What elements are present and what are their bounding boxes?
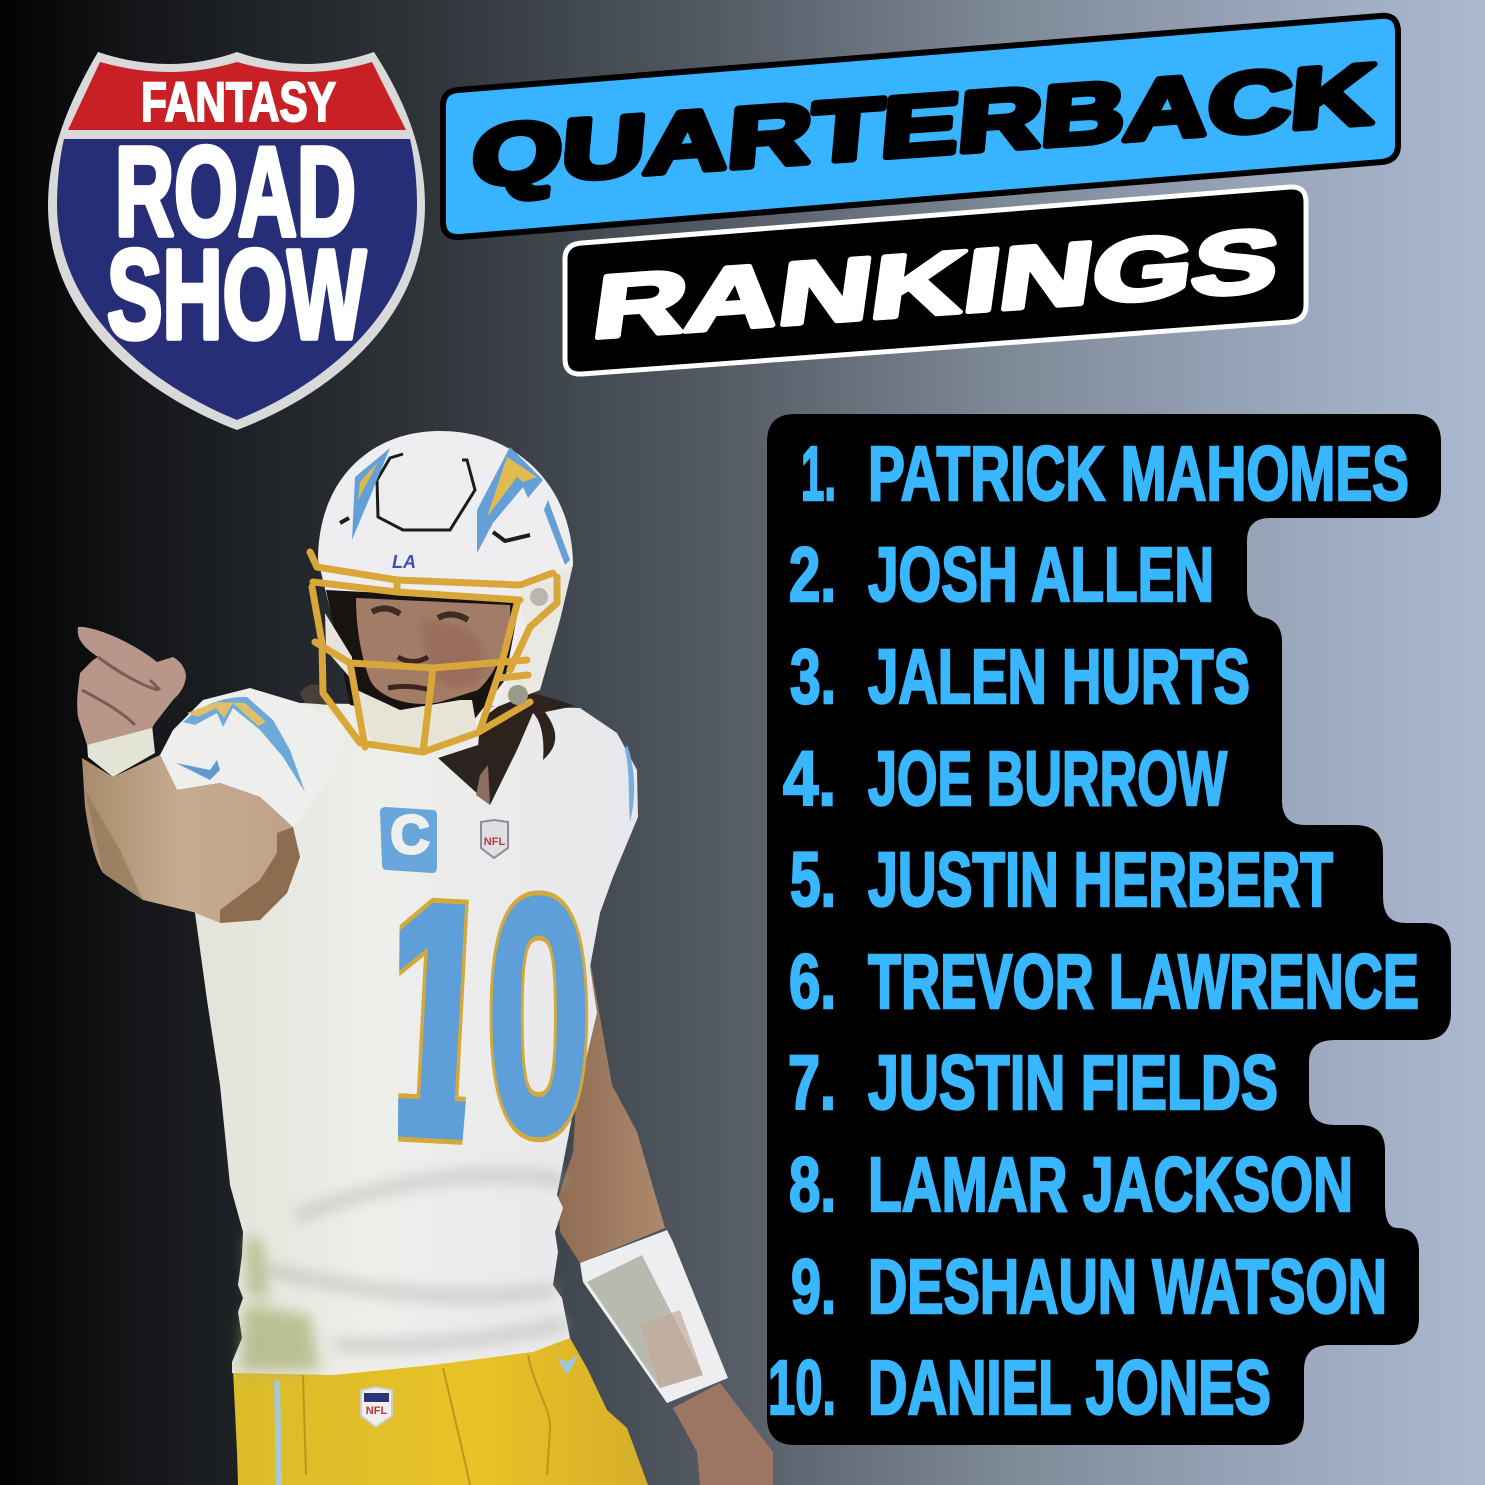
logo: Fantasy Road Show shield: SHOW: [107, 224, 366, 365]
captain patch: [380, 805, 437, 873]
rank 4: JOE BURROW: [868, 736, 1227, 822]
jersey number 10: [398, 890, 588, 1145]
rank 7: JUSTIN FIELDS: [868, 1040, 1278, 1126]
wristband card tint: [640, 1310, 703, 1388]
rank 3: [790, 634, 1250, 720]
logo: Fantasy Road Show shield: [48, 52, 425, 430]
collar logo: NFL: [484, 836, 505, 848]
jersey body: [195, 703, 638, 1375]
pants stripe: [274, 1380, 282, 1485]
jersey grime: [240, 1235, 320, 1372]
captain patch: C: [390, 805, 430, 865]
hair: [478, 690, 575, 760]
collar logo: [481, 820, 508, 858]
rank 7: [788, 1040, 1278, 1126]
pants seams: [303, 1355, 550, 1485]
helmet interior: [326, 590, 520, 725]
jersey sleeve: [160, 688, 345, 827]
helmet top vent: [377, 454, 475, 530]
rank 3: JALEN HURTS: [868, 634, 1250, 720]
forearm shadow: [85, 790, 143, 900]
chin strap: [357, 690, 478, 752]
helmet shell: [318, 431, 573, 707]
eyes: [372, 608, 468, 620]
logo: Fantasy Road Show shield: FANTASY: [141, 70, 336, 133]
neck skin: [476, 765, 490, 805]
title banner: Quarterback: QUARTERBACK: [468, 47, 1379, 205]
rankings panel: [767, 414, 1451, 1445]
rank 2: [789, 532, 1214, 618]
rank 8: [789, 1142, 1353, 1228]
rank 4: 4.: [783, 736, 836, 822]
helmet bolt left: [352, 448, 390, 540]
hair behind helmet: [300, 684, 330, 705]
jersey number 10: 0: [486, 829, 592, 1204]
rank 6: 6.: [789, 939, 836, 1025]
player photo illustration: [77, 431, 773, 1485]
neckline: [438, 745, 517, 805]
hand folds: [82, 657, 160, 725]
right upper arm: [558, 960, 665, 1263]
pants logo: [361, 1387, 392, 1427]
jersey waist folds: [270, 1175, 560, 1346]
rank 7: 7.: [788, 1040, 836, 1126]
right hand: [673, 1383, 773, 1485]
right wrist wrap: [580, 1230, 728, 1403]
rank 1: 1.: [801, 431, 836, 517]
pants logo: NFL: [366, 1405, 387, 1417]
helmet side piece right: [497, 565, 573, 707]
helmet side vents: [340, 518, 530, 541]
armpit shadow: [220, 827, 300, 923]
shoulder bolt gold: [187, 702, 266, 726]
title banner: Quarterback: [443, 16, 1398, 237]
helmet LA logo: LA: [392, 552, 416, 572]
rank 2: JOSH ALLEN: [868, 532, 1214, 618]
rank 5: 5.: [790, 837, 836, 923]
rank 10: [768, 1345, 1271, 1431]
rank 4: [783, 736, 1227, 822]
helmet screws: [530, 588, 548, 606]
pants: [233, 1338, 648, 1485]
face: [356, 598, 510, 704]
shoulder bolt: [173, 697, 305, 792]
facemask: [310, 552, 557, 752]
jersey number 10: 1: [361, 830, 511, 1211]
rank 3: 3.: [790, 634, 836, 720]
logo: Fantasy Road Show shield: ROAD: [115, 121, 356, 262]
pointing arm: [82, 755, 300, 923]
nose and mouth: [388, 657, 430, 690]
rank 10: 10.: [768, 1345, 836, 1431]
rank 9: 9.: [791, 1244, 836, 1330]
jersey number 10: 0: [486, 829, 592, 1204]
right sleeve trim: [625, 745, 634, 822]
title banner: Rankings: RANKINGS: [587, 209, 1285, 357]
rank 5: [790, 837, 1333, 923]
title banner: Rankings: [565, 187, 1306, 374]
rank 2: 2.: [789, 532, 836, 618]
helmet bolt right gold: [487, 457, 537, 517]
sleeve swoosh: [176, 760, 220, 780]
helmet bolt left gold: [358, 462, 378, 500]
rank 10: DANIEL JONES: [868, 1345, 1271, 1431]
helmet padding left: [325, 613, 352, 680]
wrist tape: [87, 725, 155, 777]
rank 8: 8.: [789, 1142, 836, 1228]
pointing hand: [77, 627, 186, 745]
helmet number: [544, 500, 570, 565]
pants swoosh: [557, 1355, 579, 1375]
face shading: [420, 620, 484, 687]
helmet bolt right: [477, 447, 543, 553]
playbook wristband card: [587, 1255, 703, 1388]
jersey number 10: 1: [361, 830, 511, 1211]
